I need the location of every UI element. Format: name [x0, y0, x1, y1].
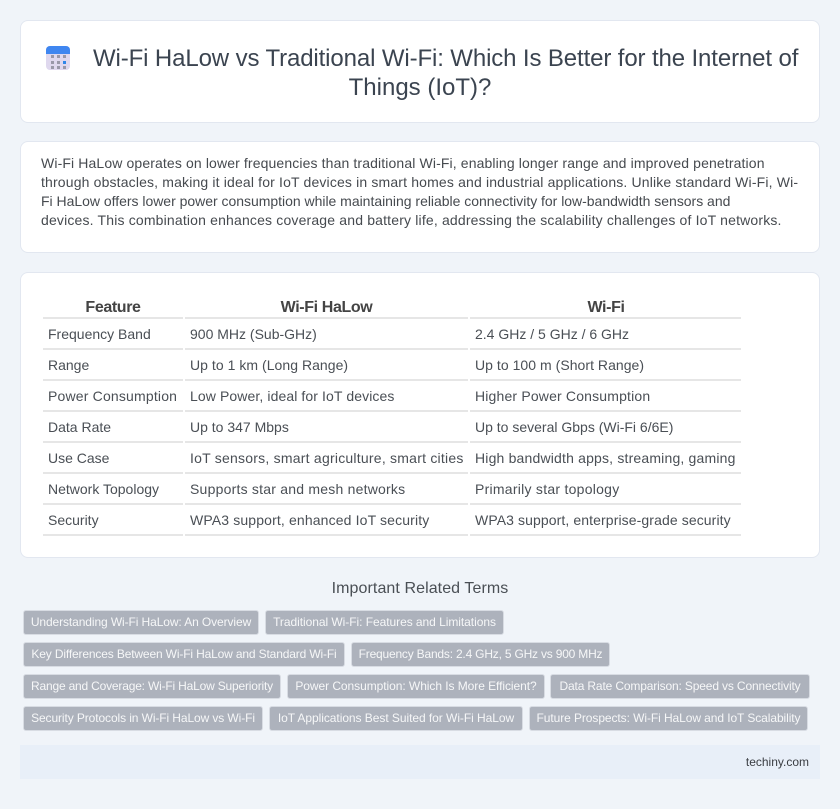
table rows: Up to several Gbps (Wi-Fi 6/6E)	[475, 419, 673, 435]
table rows: High bandwidth apps, streaming, gaming	[475, 450, 736, 466]
title: Wi-Fi HaLow vs Traditional Wi-Fi: Which Is Better for the Internet of	[93, 45, 798, 72]
table rows: 900 MHz (Sub-GHz)	[190, 326, 317, 342]
related terms tags: Traditional Wi-Fi: Features and Limitations	[273, 615, 496, 629]
table rows: Data Rate	[48, 419, 111, 435]
table header row	[85, 299, 625, 316]
table header row: Wi-Fi HaLow	[281, 299, 372, 316]
footer brand: techiny.com	[746, 755, 809, 769]
related terms tags: Security Protocols in Wi-Fi HaLow vs Wi-Fi	[31, 711, 255, 725]
table rows: 2.4 GHz / 5 GHz / 6 GHz	[475, 326, 629, 342]
table rows: Up to 347 Mbps	[190, 419, 289, 435]
table rows: Supports star and mesh networks	[190, 481, 405, 497]
table rows: IoT sensors, smart agriculture, smart cities	[190, 450, 464, 466]
table rows: Up to 100 m (Short Range)	[475, 357, 644, 373]
intro text: through obstacles, making it ideal for IoT devices in smart homes and industrial applications. Unlike standard Wi-Fi, Wi-	[41, 174, 798, 190]
title: Things (IoT)?	[349, 74, 491, 101]
related terms tags: Range and Coverage: Wi-Fi HaLow Superiority	[31, 679, 273, 693]
title	[93, 45, 798, 101]
table header row: Feature	[85, 299, 141, 316]
table header row: Wi-Fi	[587, 299, 625, 316]
related terms tags	[23, 610, 810, 731]
related terms tags: Key Differences Between Wi-Fi HaLow and Standard Wi-Fi	[31, 647, 337, 661]
related terms tags: Power Consumption: Which Is More Efficient?	[295, 679, 537, 693]
footer bar	[20, 745, 820, 779]
table rows: Low Power, ideal for IoT devices	[190, 388, 394, 404]
table rows: Use Case	[48, 450, 109, 466]
table rows: Up to 1 km (Long Range)	[190, 357, 348, 373]
table rows	[43, 317, 741, 536]
related terms tags: Frequency Bands: 2.4 GHz, 5 GHz vs 900 MHz	[359, 647, 602, 661]
intro text	[41, 155, 798, 228]
header panel	[20, 20, 820, 123]
table rows: Security	[48, 512, 99, 528]
table rows: Frequency Band	[48, 326, 151, 342]
table rows: Power Consumption	[48, 388, 177, 404]
comparison table panel	[20, 272, 820, 558]
intro panel	[20, 141, 820, 253]
table rows: Range	[48, 357, 89, 373]
table rows: WPA3 support, enterprise-grade security	[475, 512, 731, 528]
table rows: WPA3 support, enhanced IoT security	[190, 512, 429, 528]
related terms tags: Data Rate Comparison: Speed vs Connectivity	[559, 679, 800, 693]
related terms heading: Important Related Terms	[332, 580, 508, 597]
table rows: Network Topology	[48, 481, 159, 497]
intro text: Wi-Fi HaLow operates on lower frequencies than traditional Wi-Fi, enabling longer range and improved penetration	[41, 155, 765, 171]
intro text: devices. This combination enhances coverage and battery life, addressing the scalability challenges of IoT networks.	[41, 212, 782, 228]
related terms tags: Future Prospects: Wi-Fi HaLow and IoT Scalability	[537, 711, 800, 725]
table rows: Primarily star topology	[475, 481, 619, 497]
related terms tags: IoT Applications Best Suited for Wi-Fi HaLow	[278, 711, 514, 725]
table rows: Higher Power Consumption	[475, 388, 650, 404]
related terms tags: Understanding Wi-Fi HaLow: An Overview	[31, 615, 251, 629]
icon: calendar grid	[46, 46, 70, 70]
intro text: Fi HaLow offers lower power consumption while maintaining reliable connectivity for low-bandwidth sensors and	[41, 193, 730, 209]
